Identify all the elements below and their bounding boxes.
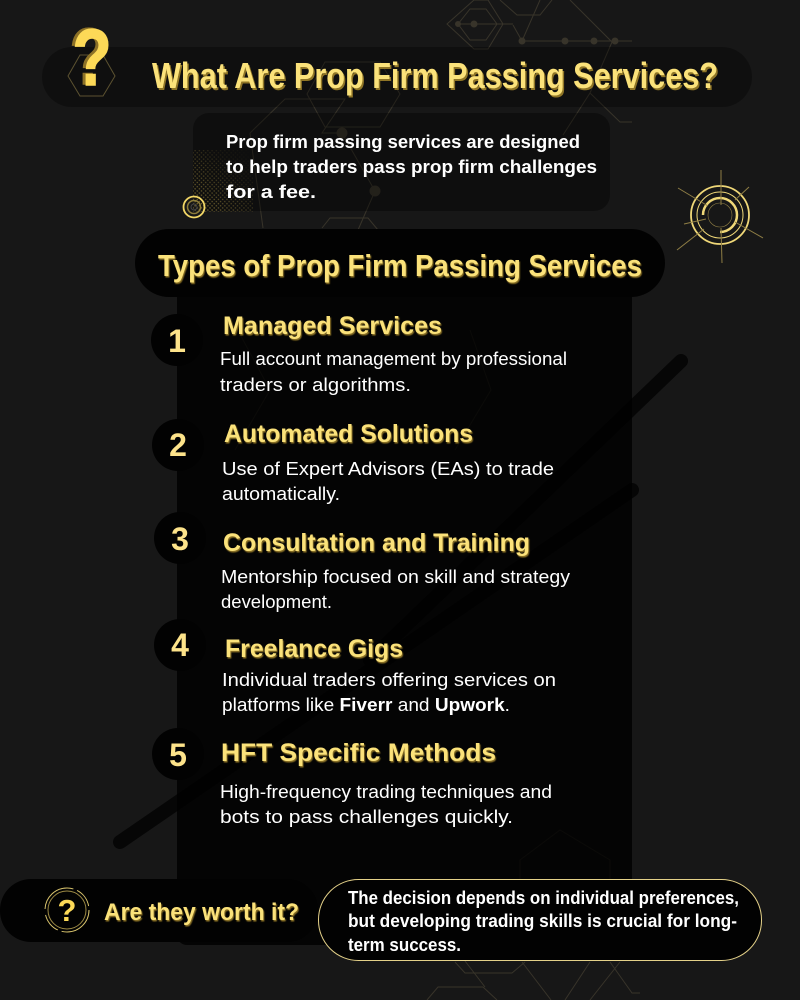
conclusion callout: but developing trading skills is crucial for long- [348, 911, 737, 931]
intro text: to help traders pass prop firm challenges [226, 157, 597, 177]
service item 2: automatically. [222, 484, 340, 504]
service item 4: 4 [171, 627, 189, 663]
intro box [193, 113, 610, 212]
conclusion callout: term success. [348, 935, 461, 955]
icon: question badge [45, 888, 89, 932]
service item 4: Individual traders offering services on [222, 670, 556, 690]
service item 5 [152, 728, 552, 827]
icon: question mark with hexagon: ? [69, 12, 109, 102]
service item 4: platforms like Fiverr and Upwork. [222, 695, 510, 715]
background hexagon network [235, 0, 640, 1000]
types heading: Types of Prop Firm Passing Services [158, 248, 642, 283]
conclusion callout: The decision depends on individual preferences, [348, 888, 739, 908]
icon: radial sunburst [677, 170, 763, 263]
service item 2: 2 [169, 427, 187, 463]
main black panel [177, 280, 632, 945]
service item 5: bots to pass challenges quickly. [220, 807, 513, 827]
worth it label: Are they worth it? [104, 899, 299, 926]
intro text: for a fee. [226, 182, 316, 202]
intro text [226, 132, 597, 202]
are they worth it pill [0, 879, 318, 942]
service item 2: Automated Solutions [224, 420, 473, 448]
service item 4: Freelance Gigs [225, 635, 403, 663]
service item 3: Mentorship focused on skill and strategy [221, 567, 570, 587]
service item 1: 1 [168, 323, 186, 359]
title pill [42, 47, 752, 107]
title: What Are Prop Firm Passing Services? [152, 55, 718, 96]
service item 2: Use of Expert Advisors (EAs) to trade [222, 459, 554, 479]
icon: question mark with hexagon: ? [72, 13, 112, 103]
types heading pill [135, 229, 665, 297]
diagonal decorative bars [120, 361, 681, 842]
service item 3: development. [221, 592, 332, 612]
service item 4 [154, 619, 556, 715]
conclusion callout [318, 880, 762, 960]
service item 5: 5 [169, 737, 187, 773]
service item 5: HFT Specific Methods [221, 739, 496, 767]
service item 5: High-frequency trading techniques and [220, 782, 552, 802]
service item 1: Full account management by professional [220, 349, 567, 369]
icon: small ring [184, 196, 204, 218]
intro text: Prop firm passing services are designed [226, 132, 580, 152]
service item 1 [151, 312, 567, 395]
service item 1: traders or algorithms. [220, 375, 411, 395]
service item 3: 3 [171, 521, 189, 557]
service item 2 [152, 419, 554, 504]
icon: question badge: ? [58, 893, 76, 928]
service item 3: Consultation and Training [223, 529, 530, 557]
service item 1: Managed Services [223, 312, 442, 340]
service item 3 [154, 512, 570, 612]
